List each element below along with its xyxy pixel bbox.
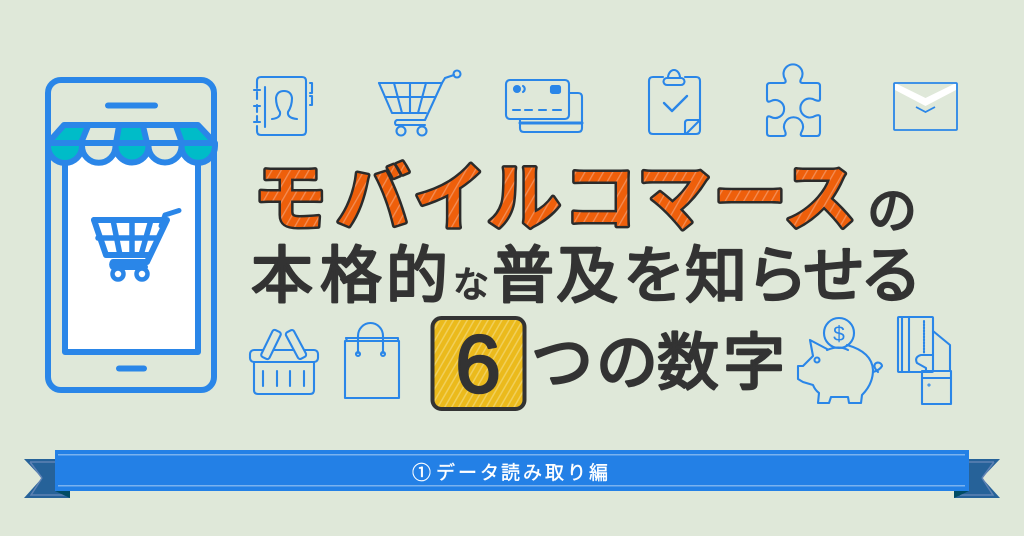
icon: hand holding card <box>898 317 951 404</box>
title line 1: モバイルコマース <box>253 157 857 240</box>
title particle: の: の <box>867 183 917 239</box>
icon: address book <box>254 77 312 135</box>
icon: credit cards <box>506 80 582 132</box>
screen <box>65 150 198 352</box>
icon: shopping bag <box>345 323 399 398</box>
ribbon tail left <box>24 459 70 498</box>
icon: puzzle piece <box>767 64 820 136</box>
ribbon banner <box>24 450 1000 498</box>
home button <box>119 366 144 372</box>
icon: shopping cart <box>379 70 460 136</box>
ribbon band <box>55 450 969 491</box>
phone body <box>48 80 214 390</box>
icon: clipboard with check <box>649 70 700 134</box>
number badge: 6 <box>432 318 524 410</box>
icon: envelope <box>894 83 957 130</box>
icon: piggy bank with coin: $ <box>833 323 845 346</box>
title particle: な: な <box>453 264 489 305</box>
icon: smartphone storefront <box>48 80 215 390</box>
icon: piggy bank with coin <box>798 318 882 403</box>
title line 2 continued: 普及を知らせる <box>492 242 922 311</box>
icon: cart on screen <box>94 210 179 280</box>
awning <box>48 125 215 163</box>
number badge: 6: 6 <box>455 319 501 410</box>
icon: shopping basket <box>250 329 318 394</box>
speaker <box>108 102 155 108</box>
title line 2: 本格的 <box>251 242 448 311</box>
ribbon text: ①データ読み取り編 <box>412 462 608 484</box>
ribbon tail right <box>954 459 1000 498</box>
title line 3: つの数字 <box>531 329 785 398</box>
